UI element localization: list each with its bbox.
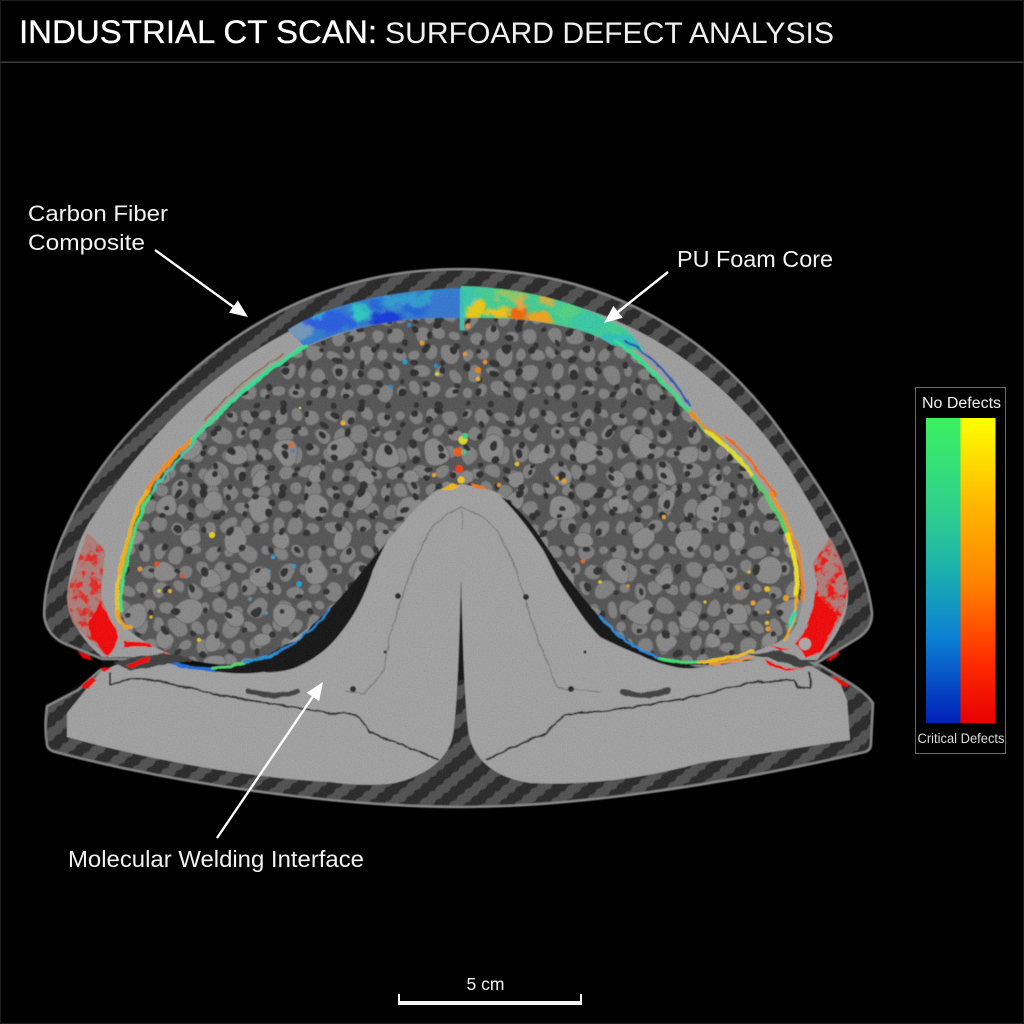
right resin-loss defect [795, 537, 848, 657]
left defect band (blue) [287, 287, 461, 346]
legend: defect colour scale: No Defects [922, 395, 1001, 412]
notch dark joint [112, 650, 815, 670]
lower carbon fiber shell [46, 665, 873, 807]
right defect band (green to orange) [460, 284, 650, 354]
heading: subtitle part: SURFOARD DEFECT ANALYSIS [385, 17, 834, 50]
central vertical seam [460, 288, 464, 330]
scale bar [398, 974, 582, 1005]
callout: molecular welding interface: Molecular Welding Interface [68, 846, 364, 872]
left resin-loss defect [67, 533, 118, 657]
dark crescent gap [205, 480, 700, 680]
rim defect traces: right [600, 340, 802, 664]
callout: molecular welding interface [68, 682, 364, 872]
legend: defect colour scale: Critical Defects [918, 731, 1005, 746]
callout: PU foam core: PU Foam Core [677, 246, 833, 272]
callout: carbon fiber composite: Composite [28, 230, 145, 255]
welded deck body [67, 484, 850, 785]
rim defect traces: left [116, 347, 330, 670]
CT scan cross-section [44, 269, 873, 807]
internal weld cracks [110, 505, 810, 759]
weld voids [350, 593, 586, 692]
legend: defect colour scale [916, 388, 1006, 754]
callout: carbon fiber composite: Carbon Fiber [28, 201, 169, 226]
grey laminate layer [67, 290, 848, 660]
legend cool bar [926, 418, 960, 723]
upper carbon fiber shell [44, 269, 872, 663]
legend warm bar [960, 418, 996, 723]
notch defects [78, 640, 850, 689]
heading: bold part: INDUSTRIAL CT SCAN: [19, 14, 377, 50]
foam defect specks [138, 323, 789, 642]
PU foam core [118, 317, 803, 666]
callout: carbon fiber composite [28, 201, 248, 317]
scan grain overlay [40, 265, 880, 811]
callout: PU foam core [604, 246, 833, 323]
scale bar: 5 cm [467, 974, 504, 994]
